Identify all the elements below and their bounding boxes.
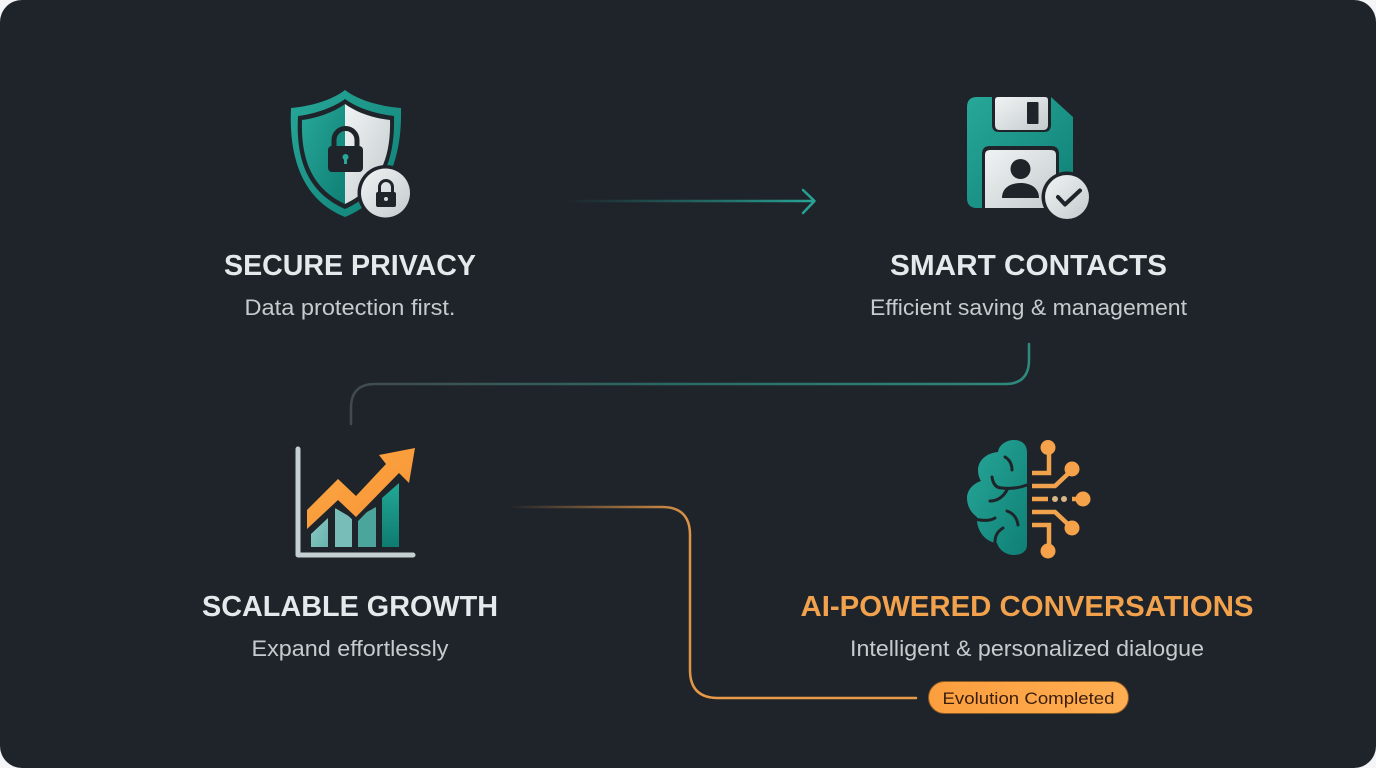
text: secure privacy description: Data protection first. <box>244 295 456 320</box>
badge: evolution completed <box>928 682 1128 714</box>
text: scalable growth description: Expand effortlessly <box>252 636 448 661</box>
heading: smart contacts: SMART CONTACTS <box>890 250 1167 282</box>
icon: shield with padlocks <box>291 90 414 221</box>
text: smart contacts description: Efficient saving & management <box>870 295 1187 320</box>
icon: AI brain with circuits <box>967 440 1090 558</box>
heading: AI-powered conversations: AI-POWERED CONVERSATIONS <box>800 591 1254 623</box>
heading: scalable growth: SCALABLE GROWTH <box>202 591 498 623</box>
connector: contacts to growth <box>351 344 1029 424</box>
text: AI description: Intelligent & personalized dialogue <box>850 636 1204 661</box>
heading: secure privacy: SECURE PRIVACY <box>224 250 476 282</box>
arrow: privacy to contacts <box>565 190 814 213</box>
badge: evolution completed: Evolution Completed <box>942 689 1114 708</box>
connector: growth to completion <box>510 507 916 698</box>
icon: floppy disk with contact <box>967 97 1092 222</box>
icon: growth chart <box>298 448 415 555</box>
